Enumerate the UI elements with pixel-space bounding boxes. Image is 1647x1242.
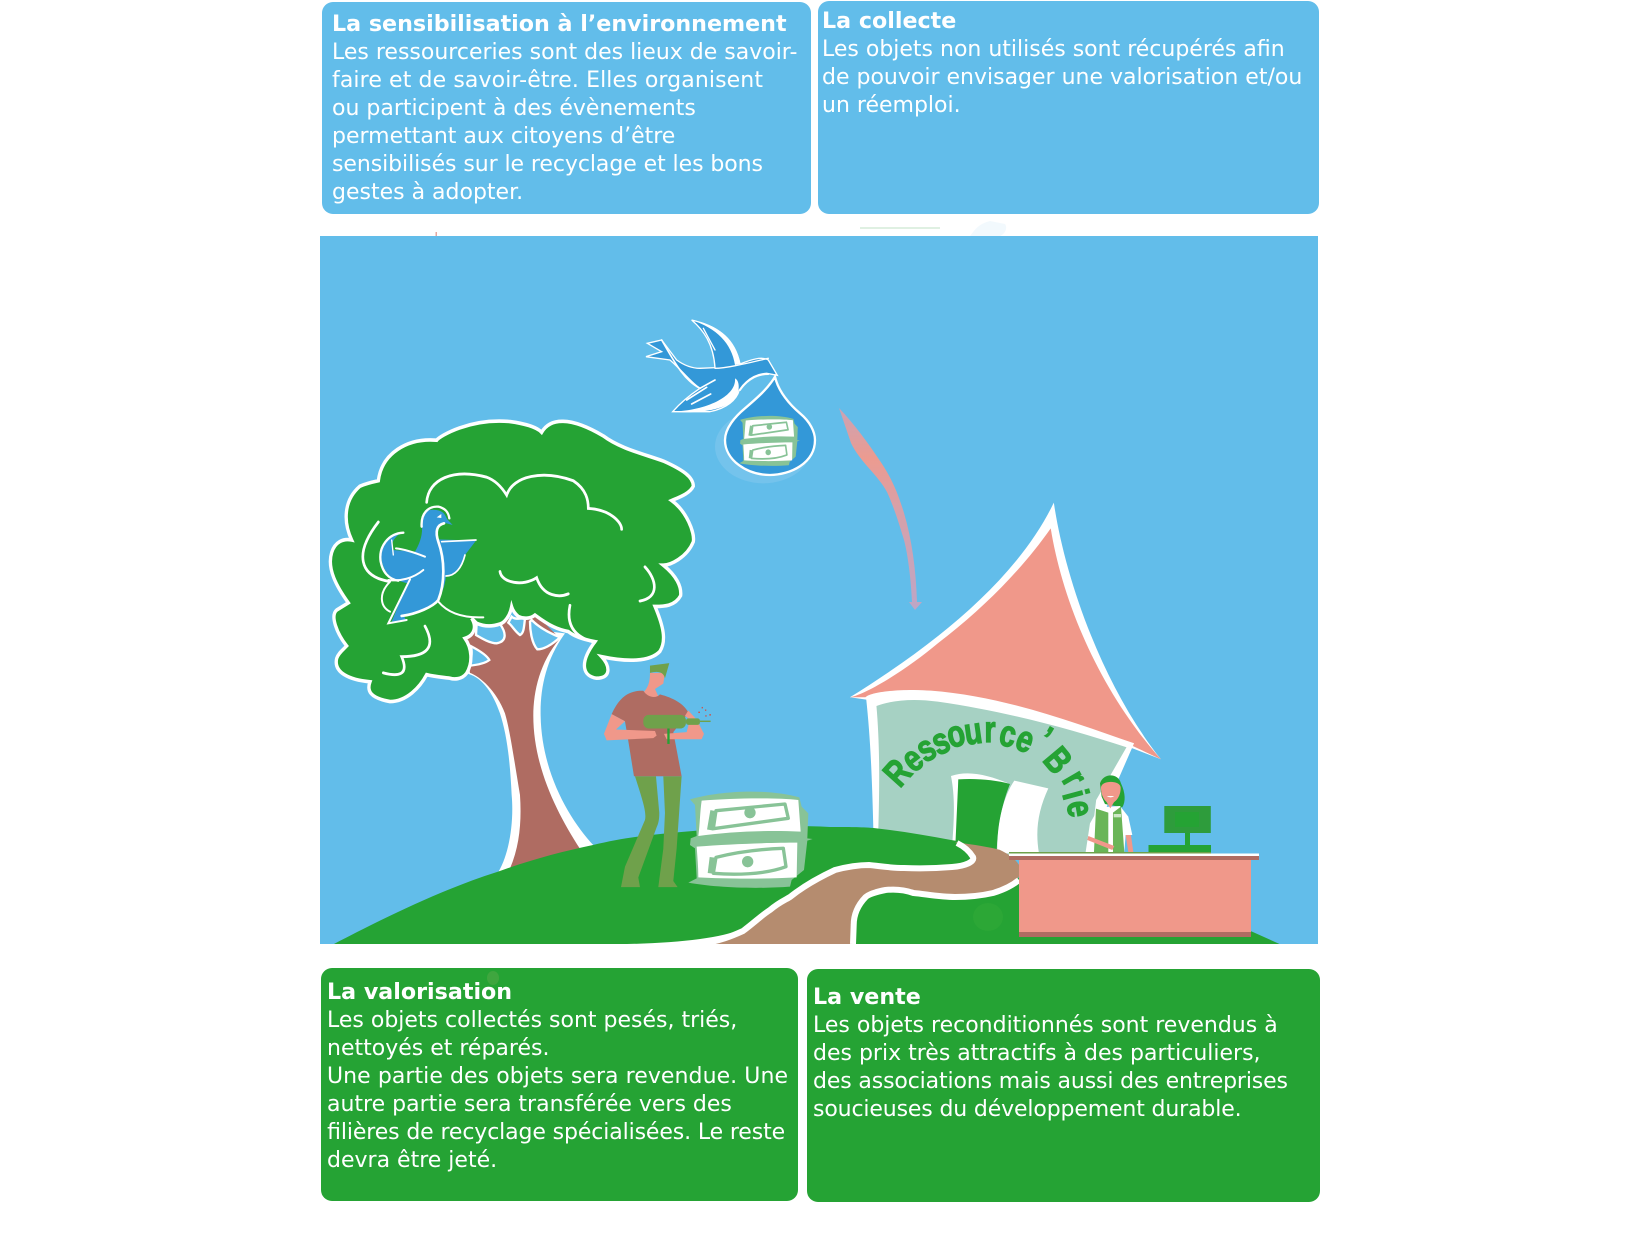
heading: la valorisation: La valorisation <box>327 979 512 1005</box>
panel: la valorisation <box>321 968 798 1201</box>
canopy inner lines <box>363 474 654 675</box>
heading: la vente: La vente <box>813 984 921 1010</box>
shirt <box>612 691 688 776</box>
icon: bird <box>646 320 777 412</box>
tree trunk <box>465 615 593 872</box>
house sign text: c <box>996 713 1020 756</box>
house sign text <box>876 710 1101 820</box>
heading: la collecte: La collecte <box>822 8 956 34</box>
bottle <box>643 707 711 744</box>
house sign text: R <box>876 752 920 795</box>
text block: sensibilisation: permettant aux citoyens d’être <box>332 124 675 149</box>
text block: valorisation: Une partie des objets sera revendue. Une <box>327 1064 788 1089</box>
house sign text: u <box>961 710 985 754</box>
roof <box>850 503 1161 759</box>
face <box>1101 782 1121 808</box>
flying bird with bag <box>646 320 815 483</box>
panel: la collecte <box>818 1 1319 214</box>
tree canopy <box>330 421 694 702</box>
house sign text: r <box>984 710 996 751</box>
text block: valorisation <box>327 1008 788 1173</box>
house sign text: r <box>1053 763 1095 794</box>
text block: sensibilisation <box>332 40 797 205</box>
arms <box>604 711 704 740</box>
text block: collecte: de pouvoir envisager une valorisation et/ou <box>822 65 1302 90</box>
house <box>850 503 1161 857</box>
text block: vente: des prix très attractifs à des particuliers, <box>813 1041 1261 1066</box>
house sign text: ’ <box>1031 720 1059 759</box>
door <box>951 773 1048 853</box>
house sign text: e <box>893 738 932 781</box>
shirt and vest <box>1086 806 1132 852</box>
house sign text: e <box>1010 718 1040 762</box>
panel: la sensibilisation <box>322 2 811 214</box>
text block: sensibilisation: sensibilisés sur le recyclage et les bons <box>332 152 763 177</box>
heading: la sensibilisation à l'environnement: La sensibilisation à l’environnement <box>332 11 787 37</box>
text block: valorisation: filières de recyclage spécialisées. Le reste <box>327 1120 785 1145</box>
icon: cash register <box>1148 806 1211 853</box>
tree <box>330 421 694 872</box>
hill <box>334 826 1280 944</box>
road <box>627 842 1021 944</box>
counter <box>1009 852 1259 937</box>
text block: valorisation: autre partie sera transférée vers des <box>327 1092 732 1117</box>
icon: dove in tree <box>380 507 483 623</box>
icon: bag halo <box>715 410 812 483</box>
sky background <box>320 236 1318 944</box>
walls <box>866 690 1134 857</box>
house sign text: o <box>942 712 969 757</box>
text block: sensibilisation: Les ressourceries sont des lieux de savoir- <box>332 40 797 65</box>
text block: valorisation: nettoyés et réparés. <box>327 1036 549 1061</box>
text block: valorisation: Les objets collectés sont pesés, triés, <box>327 1008 737 1033</box>
person with spray bottle <box>604 663 711 887</box>
house sign text: e <box>1058 797 1101 820</box>
text block: collecte: un réemploi. <box>822 93 961 118</box>
house sign text: i <box>1054 785 1096 804</box>
icon: large dresser <box>688 792 813 888</box>
text block: vente: des associations mais aussi des entreprises <box>813 1069 1288 1094</box>
text block: vente: soucieuses du développement durable. <box>813 1097 1242 1122</box>
icon: small dresser in bag <box>739 416 800 466</box>
woman's arms <box>1087 835 1133 852</box>
sky gaps between branches <box>469 617 560 666</box>
trousers <box>621 776 682 887</box>
text block: sensibilisation: ou participent à des évènements <box>332 96 696 121</box>
panel: la vente <box>807 969 1320 1202</box>
text block: collecte: Les objets non utilisés sont récupérés afin <box>822 37 1285 62</box>
text block: vente <box>813 1013 1288 1122</box>
shopkeeper <box>1086 775 1133 852</box>
text block: collecte <box>822 37 1302 118</box>
text block: sensibilisation: faire et de savoir-être. Elles organisent <box>332 68 763 93</box>
head and hair <box>643 663 669 699</box>
text block: vente: Les objets reconditionnés sont revendus à <box>813 1013 1278 1038</box>
hair <box>1100 775 1125 807</box>
text block: sensibilisation: gestes à adopter. <box>332 180 523 205</box>
house sign text: B <box>1035 740 1080 782</box>
illustration: scene <box>320 221 1318 944</box>
house sign text: s <box>925 720 956 764</box>
arrow <box>839 408 922 610</box>
house sign text: s <box>909 727 943 771</box>
text block: valorisation: devra être jeté. <box>327 1148 497 1173</box>
icon: water-drop bag <box>725 377 815 475</box>
